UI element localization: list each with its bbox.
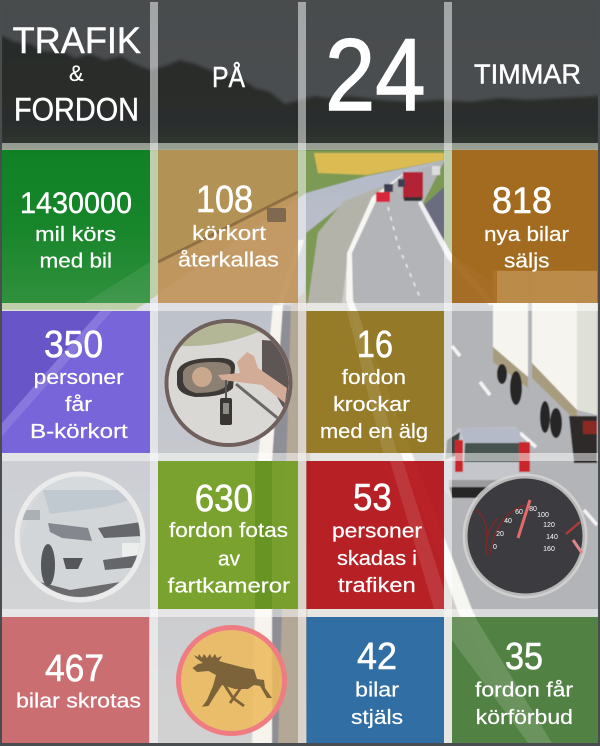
panel: 1430000 mil: mil körs <box>35 224 116 246</box>
panel: 108 körkort <box>158 150 298 303</box>
panel: 42 bilar: stjäls <box>351 707 403 729</box>
panel: 35 fordon <box>452 617 598 743</box>
panel: 350 personer: personer <box>34 367 124 389</box>
icon: speedometer <box>465 476 585 596</box>
panel: 108 körkort: återkallas <box>178 250 279 272</box>
panel: 350 personer: 350 <box>44 324 103 366</box>
panel: 350 personer <box>2 311 150 453</box>
icon: speedometer: 80 <box>529 506 537 513</box>
panel: 16 fordon <box>306 311 444 453</box>
icon: speedometer: 20 <box>496 531 504 538</box>
panel: 53 personer: 53 <box>353 477 392 519</box>
pale cell wash: car <box>2 461 150 609</box>
panel: 1430000 mil <box>2 150 150 303</box>
icon: speedometer: 0 <box>493 544 497 551</box>
panel: 53 personer: skadas i <box>337 548 417 570</box>
panel: 467 bilar skrotas: bilar skrotas <box>16 691 141 713</box>
icon: speedometer: 60 <box>515 509 523 516</box>
panel: 350 personer: får <box>65 394 92 416</box>
panel: 1430000 mil: 1430000 <box>20 187 132 220</box>
panel: 42 bilar <box>306 617 444 743</box>
panel: 630 fordon: fartkameror <box>168 576 290 598</box>
panel: 350 personer: B-körkort <box>30 421 128 443</box>
header band overlay <box>2 2 598 143</box>
heading: PÅ: PÅ <box>212 61 246 94</box>
panel: 818 nya bilar: säljs <box>504 251 550 273</box>
panel: 108 körkort: 108 <box>196 179 253 221</box>
icon: speedometer: 120 <box>543 522 555 529</box>
title column <box>13 20 141 128</box>
panel: 16 fordon: krockar <box>333 394 410 416</box>
icon: speedometer: 40 <box>504 518 512 525</box>
icon: speedometer: 100 <box>537 512 549 519</box>
panel: 53 personer <box>306 461 444 609</box>
panel: 818 nya bilar: nya bilar <box>484 224 569 246</box>
heading: TIMMAR: TIMMAR <box>474 58 581 90</box>
panel: 35 fordon: fordon får <box>475 680 573 702</box>
title column: & <box>69 61 84 86</box>
icon: speedometer: 140 <box>546 534 558 541</box>
panel: 630 fordon: fordon fotas <box>169 520 288 542</box>
panel: 630 fordon <box>158 461 298 609</box>
panel: 35 fordon: körförbud <box>476 707 573 729</box>
truck <box>493 270 528 377</box>
icon: moose warning sign <box>178 628 284 734</box>
panel: 53 personer: trafiken <box>338 575 416 597</box>
panel: 42 bilar: bilar <box>355 680 399 702</box>
panel: 35 fordon: 35 <box>505 636 543 678</box>
icon: speedometer: 160 <box>543 546 555 553</box>
panel: 630 fordon: av <box>218 549 240 571</box>
panel: 42 bilar: 42 <box>357 636 397 678</box>
panel: 818 nya bilar: 818 <box>492 180 552 221</box>
heading: 24: 24 <box>325 18 426 132</box>
panel: 467 bilar skrotas: 467 <box>45 648 104 690</box>
panel: 16 fordon: 16 <box>357 324 393 366</box>
panel: 108 körkort: körkort <box>192 223 267 245</box>
panel: 467 bilar skrotas <box>2 617 149 743</box>
title column: FORDON <box>14 92 139 128</box>
panel: 53 personer: personer <box>332 521 422 543</box>
title column: TRAFIK <box>13 20 141 61</box>
icon: hand with car keys in mirror <box>165 320 295 450</box>
panel: 818 nya bilar <box>452 150 598 303</box>
panel: 630 fordon: 630 <box>195 478 253 520</box>
far traffic <box>403 172 423 199</box>
car <box>443 427 530 498</box>
icon: silver car <box>15 474 145 607</box>
panel: 16 fordon: fordon <box>342 367 406 389</box>
panel: 16 fordon: med en älg <box>320 421 428 443</box>
panel: 1430000 mil: med bil <box>40 250 112 272</box>
